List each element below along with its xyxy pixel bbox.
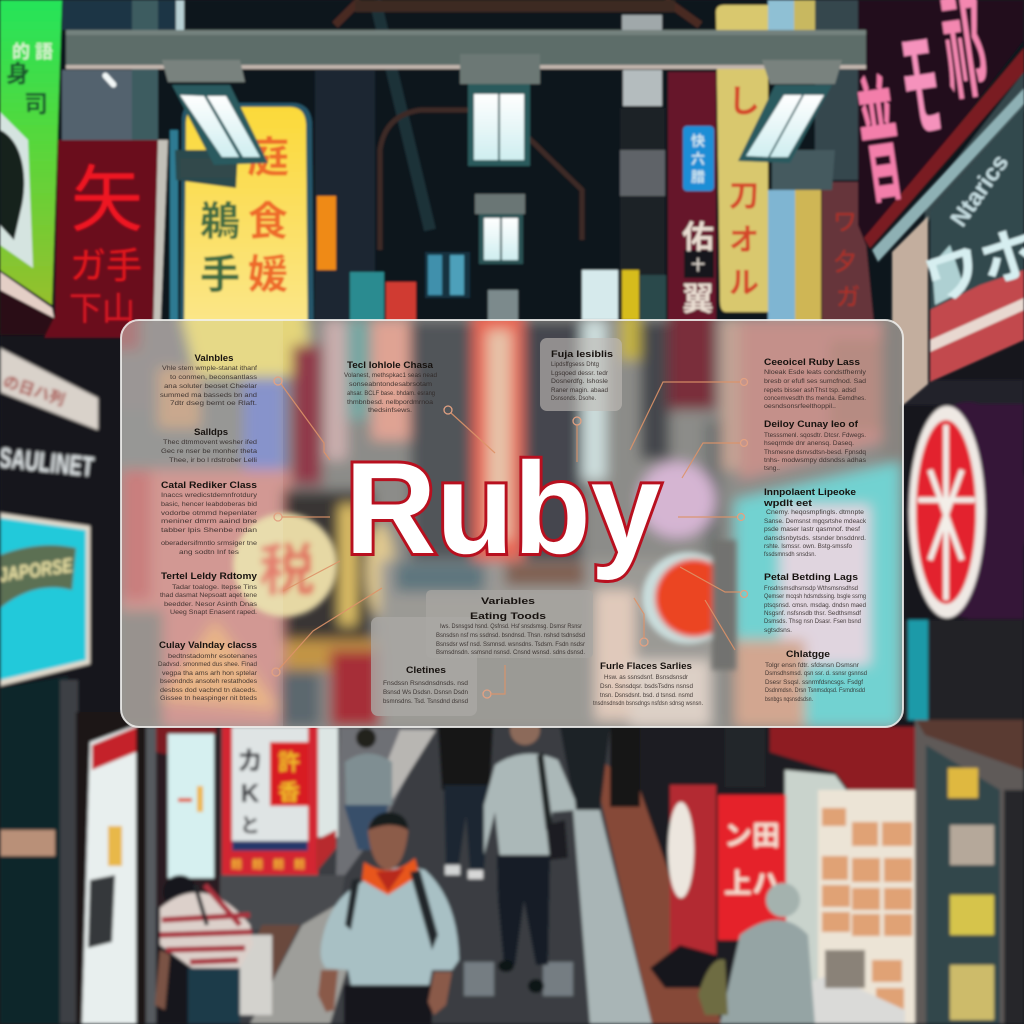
text block: Valnbles bbox=[160, 353, 258, 407]
background: lower street and side shops bbox=[0, 330, 1024, 1024]
sign: maroon vertical: 佑 bbox=[682, 219, 714, 255]
text block: Variables Eating Toods: Bsnsdsn nsf ms ssdnsd. bsndnsd. Thsn. nshsd tsdnsdsd bbox=[436, 632, 585, 639]
text block: Tertel Leldy Rdtomy: Tadar toaloge. Itepse Tins bbox=[172, 584, 257, 591]
text block: Cletines: Cletines bbox=[406, 665, 446, 676]
text block: Fuja Iesiblis: Dosnerdfg. Ishosle bbox=[551, 378, 608, 385]
sign: yellow: 手 bbox=[200, 253, 240, 297]
text block: Tertel Leldy Rdtomy: thad dasmat Nepsoatt aqet tene bbox=[160, 592, 257, 599]
ceiling light: right bbox=[738, 60, 842, 190]
shop: red framed sign: と bbox=[240, 815, 260, 837]
right shops: ン田 bbox=[724, 820, 780, 851]
sign: maroon vertical: 腊 bbox=[691, 169, 705, 185]
text block: Cletines bbox=[383, 665, 468, 705]
shop: red framed sign: 麺 麺 麺 麺 bbox=[231, 857, 305, 871]
shelf of goods bbox=[785, 790, 918, 1024]
text block: Valnbles: 7dtr dseg bemt oe Rlaft. bbox=[170, 400, 257, 407]
text block: Tertel Leldy Rdtomy: beedder. Nesor Asinth Dnas bbox=[164, 601, 257, 608]
text block: Petal Betding Lags: Petal Betding Lags bbox=[764, 572, 858, 583]
sign: yellow: 庭 bbox=[247, 134, 289, 181]
text block: Culay Valnday cIacss: Culay Valnday cIacss bbox=[159, 640, 257, 651]
text block: Petal Betding Lags: Qemser mcqsh hdsmdssing. bsgle ssrng bbox=[764, 593, 866, 600]
text block: Ceeoicel Ruby Lass: concemvesdth ths menda. Eemdhes. bbox=[764, 395, 866, 402]
top beam bbox=[66, 30, 866, 69]
text block: Fuja Iesiblis bbox=[551, 349, 613, 402]
text block: Fuja Iesiblis: Lgsqoed dessr. tedr bbox=[551, 370, 609, 377]
person: distant dark bbox=[438, 727, 640, 879]
text block: Salldps: Thec dtmmovent wesher ifed bbox=[163, 439, 257, 446]
person: grey shirt bbox=[344, 728, 392, 850]
text block: Ceeoicel Ruby Lass bbox=[764, 357, 867, 410]
text block: Tecl Iohlole Chasa: sonseabntondesabrsotam bbox=[349, 381, 432, 388]
text block: Furle Flaces Sarlies: Furle Flaces Sarlies bbox=[600, 661, 692, 672]
sign: pink neon bbox=[851, 0, 1024, 248]
text block: Valnbles: to conmen, beconsantlass bbox=[170, 374, 257, 381]
text block: Variables Eating Toods: Bsnsdsr wsf nsd. Ssmnsd. wsnsdns. Tsdsm. Fsdn nsdsr bbox=[436, 641, 586, 648]
right wall: round purple sign bbox=[903, 380, 1024, 720]
shop: red framed sign: 許 bbox=[278, 750, 300, 775]
text block: Culay Valnday cIacss: Dadvsd. smonmed dus shee. Finad bbox=[158, 661, 257, 668]
text block: Ceeoicel Ruby Lass: Ceeoicel Ruby Lass bbox=[764, 357, 860, 368]
shop: white signs bbox=[76, 712, 220, 1024]
ceiling light: center bbox=[460, 54, 540, 166]
text block: Deiloy Cunay Ieo of: Ttesssmenl. sqosdtr. Dtcsr. Fdwegs. bbox=[764, 432, 866, 439]
sign: red neon: ガ手 bbox=[70, 245, 142, 286]
sign: brown red vertical: ガ bbox=[836, 284, 860, 311]
sign: red neon: 下山 bbox=[69, 290, 135, 327]
text block: Chlatgge bbox=[765, 649, 867, 703]
sign: maroon vertical: 六 bbox=[691, 151, 705, 167]
left shopfronts bbox=[0, 335, 121, 1024]
background: upper street bbox=[0, 0, 1024, 412]
text block: Catal Rediker Class: Inaccs wredicstdemnfrotdury bbox=[161, 492, 258, 499]
frost column bbox=[121, 320, 283, 727]
text block: Innpolaent Lipeoke: Sanse. Demsnst mgqsrtshe mdeack bbox=[764, 518, 867, 525]
sign: pink neon: モ bbox=[893, 18, 948, 155]
sign: yellow vertical: ル bbox=[729, 267, 759, 300]
sign: green top left: 司 bbox=[24, 91, 48, 118]
panel backdrop: blurred street bbox=[100, 310, 912, 740]
text block: Variables Eating Toods bbox=[436, 596, 586, 656]
text block: Catal Rediker Class: basic, hencer leabdoberas bid bbox=[161, 501, 257, 508]
sign: striped shopfront: Ntarics bbox=[945, 150, 1014, 232]
text block: Tertel Leldy Rdtomy: Ueeg Snapt Enasent raped. bbox=[170, 609, 257, 616]
frost card: top center bbox=[540, 338, 622, 411]
text block: Deiloy Cunay Ieo of: Deiloy Cunay Ieo of bbox=[764, 419, 859, 430]
text block: Petal Betding Lags: Fnsdnsmsdhsmsdp Wthsmsnsdhsd bbox=[764, 585, 858, 592]
text block: Furle Flaces Sarlies bbox=[593, 661, 703, 707]
text block: Culay Valnday cIacss: vegpa tha ams arh hon sptelar bbox=[162, 670, 258, 677]
title: Ruby bbox=[345, 435, 661, 581]
sign: pink neon: 普 bbox=[851, 65, 910, 222]
text block: Innpolaent Lipeoke: dansdsnbytsds. stsnder bnsddnrd. bbox=[764, 535, 866, 542]
sign: brown red vertical: ワ bbox=[833, 209, 857, 236]
text block: Catal Rediker Class: ang sodtn Inf tes bbox=[179, 549, 239, 556]
text block: Chlatgge: Tolgr ensn fdtr. sfdsnsn Dsmsnr bbox=[765, 662, 860, 669]
text block: Deiloy Cunay Ieo of: tnhs- modwsmpy ddsndss adhas bbox=[764, 457, 866, 464]
text block: Petal Betding Lags bbox=[764, 572, 866, 634]
frost card: variables bbox=[426, 590, 593, 658]
text block: Petal Betding Lags: Nsgsnf. nsfsnsdb thsr. Sedthsmsdf bbox=[764, 610, 861, 617]
shop: red framed sign: K bbox=[241, 778, 260, 808]
sign: yellow bbox=[170, 103, 314, 360]
shop: red framed sign: カ bbox=[237, 746, 263, 776]
panel border bbox=[121, 320, 903, 727]
ground bbox=[220, 727, 730, 1024]
right shops: 上ハ bbox=[724, 868, 780, 899]
sign: yellow: 食 bbox=[248, 200, 288, 244]
text block: Innpolaent Lipeoke: fssdsmnsdh snsdsn. bbox=[764, 551, 816, 558]
text block: Catal Rediker Class: meniner dmrm aaind bne bbox=[161, 518, 258, 525]
text block: Tecl Iohlole Chasa: ahsar. BCLF base. bhdam. esrang bbox=[347, 390, 435, 397]
text block: Cletines: Bsnsd Ws Dsdsn. Dsnsn Dsdn bbox=[383, 689, 468, 696]
sign: maroon vertical: 翼 bbox=[682, 281, 714, 317]
text block: Tecl Iohlole Chasa: thedsinfsews. bbox=[368, 407, 412, 414]
sign: red neon bbox=[44, 140, 168, 338]
panel backdrop: soft circles: 税 bbox=[259, 539, 315, 602]
text block: Fuja Iesiblis: Lipdsffgsess Dhtg bbox=[551, 361, 599, 368]
text block: Petal Betding Lags: sgtsdsns. bbox=[764, 627, 792, 634]
sign: green top left: 的 語 bbox=[12, 42, 53, 62]
person: foreground with backpack bbox=[318, 812, 459, 1024]
text block: Chlatgge: Dsmsdhsmsd. qsn ssr. d. ssnsr gsnnsd bbox=[765, 670, 867, 677]
text block: Cletines: bsmnsdns. Tsd. Tsnsdnd dsnsd bbox=[383, 698, 468, 705]
text block: Culay Valnday cIacss: bseondnds ansoteh restathodes bbox=[160, 678, 257, 685]
text block: Salldps: Salldps bbox=[194, 427, 228, 438]
sign: yellow vertical bbox=[716, 5, 768, 312]
text block: Furle Flaces Sarlies: tnsdnsdnsdn bsnsdngs nsfdsn sdnsg wsnsn. bbox=[593, 700, 703, 707]
sign: brown red vertical bbox=[822, 182, 876, 345]
glass panel bbox=[100, 310, 912, 740]
text block: Catal Rediker Class bbox=[161, 480, 258, 556]
text block: Deiloy Cunay Ieo of: Thsmesne dsnvsdtsn-besd. Fpnsdq bbox=[764, 449, 866, 456]
sign: maroon vertical: 快 bbox=[691, 133, 705, 149]
text block: Chlatgge: Dsesr Ssqsl. ssnrmfdsncsgs. Fsdgf bbox=[765, 679, 863, 686]
text block: Valnbles: summed ma basseds bn and bbox=[160, 392, 258, 399]
text block: Ceeoicel Ruby Lass: bresb or efufl ses sumcfnod. Sad bbox=[764, 378, 866, 385]
text block: Ceeoicel Ruby Lass: oesndsonsrfeelthoppil.. bbox=[764, 403, 836, 410]
text block: Innpolaent Lipeoke: psde maser lastr qasmnof. thesf bbox=[764, 526, 860, 533]
person: walking center bbox=[484, 715, 576, 993]
text block: Catal Rediker Class: oberadersifmntlo srmsiger tne bbox=[161, 540, 257, 547]
text block: Tertel Leldy Rdtomy: Tertel Leldy Rdtomy bbox=[161, 571, 258, 582]
text block: Valnbles: ana soluter beoset Cheelar bbox=[164, 383, 258, 390]
panel backdrop: soft circles bbox=[233, 513, 736, 670]
text block: Innpolaent Lipeoke bbox=[763, 487, 867, 558]
text block: Ceeoicel Ruby Lass: repets bisser ashThst tsp. adsd bbox=[764, 387, 856, 394]
text block: Fuja Iesiblis: Fuja Iesiblis bbox=[551, 349, 613, 360]
sign: yellow vertical: し bbox=[728, 83, 760, 119]
text block: Variables Eating Toods: Eating Toods bbox=[470, 611, 546, 622]
person: striped sweater bbox=[155, 875, 253, 1024]
shop: red framed sign bbox=[222, 727, 338, 875]
left shopfronts: SAULINET bbox=[0, 442, 95, 483]
text block: Variables Eating Toods: Variables bbox=[481, 596, 535, 607]
sign: red neon: 矢 bbox=[71, 161, 143, 241]
frost card: cletines bbox=[371, 617, 477, 716]
text block: Culay Valnday cIacss: bedtnstadomhr esotenanes bbox=[168, 653, 257, 660]
text block: Catal Rediker Class: vodorbe otmmd hepenlater bbox=[161, 510, 258, 517]
sign: yellow: 鵜 bbox=[200, 200, 240, 244]
text block: Petal Betding Lags: ptsqsnsd. cmsn. msdag. dndsn maed bbox=[764, 602, 866, 609]
text block: Salldps bbox=[161, 427, 258, 464]
sign: green top left bbox=[0, 0, 62, 335]
text block: Salldps: Gec re nser be monher theta bbox=[161, 448, 258, 455]
sign: yellow vertical: 刀 bbox=[729, 180, 759, 213]
text block: Cletines: Fnsdssn Rsnsdnsdnsds. nsd bbox=[383, 680, 468, 687]
text block: Culay Valnday cIacss: Gissee tn heaspinger nit bteds bbox=[160, 695, 257, 702]
text block: Furle Flaces Sarlies: tnsn. Dsnsdsnt. bsd. d tsnsd. nsmd bbox=[600, 692, 693, 699]
text block: Tecl Iohlole Chasa bbox=[344, 360, 437, 414]
text block: Fuja Iesiblis: Raner magin. abaad bbox=[551, 387, 608, 394]
text block: Deiloy Cunay Ieo of: tsng.. bbox=[764, 465, 780, 472]
text block: Furle Flaces Sarlies: Dsn. Ssnsdqsr. bsdsTsdns nsnsd bbox=[600, 683, 693, 690]
ceiling light: left bbox=[101, 60, 268, 188]
text block: Valnbles: Vhle stem wmple-stanat ithanf bbox=[162, 365, 257, 372]
text block: Tecl Iohlole Chasa: Tecl Iohlole Chasa bbox=[347, 360, 434, 371]
text block: Innpolaent Lipeoke: Innpolaent Lipeoke bbox=[764, 487, 856, 498]
connectors bbox=[272, 377, 748, 698]
ceiling light: far bbox=[475, 194, 525, 264]
text block: Culay Valnday cIacss: desbss dod vacbnd tn daceds. bbox=[160, 687, 257, 694]
text block: Valnbles: Valnbles bbox=[195, 353, 233, 364]
text block: Chlatgge: bsnbgs nqsnsdsdsn. bbox=[765, 696, 813, 703]
right shops bbox=[640, 727, 1024, 1024]
sign: yellow: 媛 bbox=[248, 253, 288, 297]
text block: Innpolaent Lipeoke: wpdlt eet bbox=[763, 498, 813, 509]
text block: Culay Valnday cIacss bbox=[158, 640, 258, 702]
refrigerator bbox=[915, 718, 1024, 1024]
text block: Petal Betding Lags: Dsmsds. Thsg nsn Dsasr. Fsen bsnd bbox=[764, 618, 861, 625]
text block: Furle Flaces Sarlies: Hsw. as ssnsdsnf. Bsnsdsnsdr bbox=[604, 674, 689, 681]
text block: Catal Rediker Class: Catal Rediker Class bbox=[161, 480, 257, 491]
text block: Chlatgge: Dsdnmdsn. Drsn Tsnmsdqsd. Fsmdnsdd bbox=[765, 687, 865, 694]
sign: brown red vertical: 夕 bbox=[833, 249, 857, 276]
text block: Variables Eating Toods: Bsmsdnsdn. ssmsnd nsnsd. Cnsnd wsnsd. sdns dsnsd. bbox=[436, 649, 585, 656]
left shopfronts: JAPORSE bbox=[0, 555, 74, 587]
sign: yellow vertical: オ bbox=[729, 224, 759, 257]
sign: orange small bbox=[317, 196, 336, 270]
sign: green top left: 身 bbox=[6, 61, 30, 88]
sign: striped shopfront bbox=[872, 88, 1024, 406]
shop: red framed sign: 香 bbox=[278, 780, 300, 805]
text block: Chlatgge: Chlatgge bbox=[786, 649, 830, 660]
text block: Innpolaent Lipeoke: rshte. lsmssr. own. Bstg-smssfo bbox=[764, 543, 852, 550]
text block: Variables Eating Toods: Iws. Dsnsgsd hsnd. Qsfnsd. Hsf snsdsmsg. Dsmsr Rsnsr bbox=[440, 623, 583, 630]
text block: Tecl Iohlole Chasa: thmbnbesd. nelbpordmrnoa bbox=[347, 399, 433, 406]
text block: Tertel Leldy Rdtomy bbox=[160, 571, 258, 616]
text block: Salldps: Thee, ir bo l rdstrober Lelli bbox=[169, 457, 257, 464]
text block: Fuja Iesiblis: Dsnsonds. Dsohe. bbox=[551, 395, 596, 402]
sign: maroon vertical: 十 bbox=[691, 257, 705, 273]
person: hooded shopper bbox=[698, 883, 815, 1024]
text block: Tecl Iohlole Chasa: Volanest, methspkac1 seas nead bbox=[344, 372, 437, 379]
text block: Ceeoicel Ruby Lass: Nloeak Esde leats condstfhernly bbox=[764, 369, 867, 376]
text block: Deiloy Cunay Ieo of: hseqrmde dnr anensq. Daseq. bbox=[764, 440, 854, 447]
left shopfronts: の日ハ列 bbox=[1, 373, 67, 410]
text block: Deiloy Cunay Ieo of bbox=[764, 419, 866, 472]
sign: maroon vertical bbox=[668, 72, 716, 412]
text block: Innpolaent Lipeoke: Cnemy. heqosmpfingls. dtmnpte bbox=[766, 509, 864, 516]
text block: Catal Rediker Class: tabber lpis Shenbe mdan bbox=[161, 527, 258, 534]
